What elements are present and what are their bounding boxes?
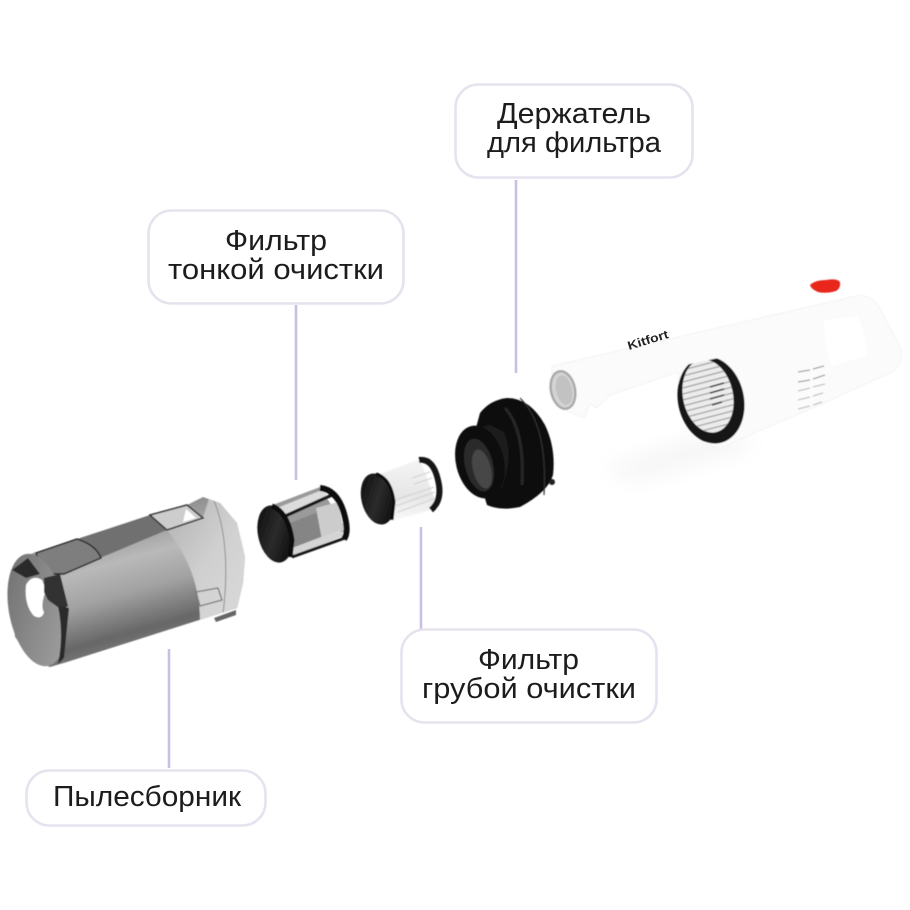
label: dust container xyxy=(26,770,266,826)
leader lines xyxy=(169,180,516,768)
label: filter holder xyxy=(456,84,692,178)
motor top cover xyxy=(676,348,732,368)
dust container xyxy=(0,490,250,671)
fine mesh filter xyxy=(252,487,347,566)
front cap xyxy=(252,502,298,566)
side vents xyxy=(798,366,825,382)
label: filter holder: Держатель xyxy=(497,98,651,130)
back ring xyxy=(320,488,347,539)
label: coarse filter xyxy=(402,630,656,722)
label: fine filter: тонкой очистки xyxy=(168,254,384,286)
handle body xyxy=(552,295,902,448)
coarse pleated filter xyxy=(356,459,439,528)
label: dust container: Пылесборник xyxy=(53,781,242,813)
front hood xyxy=(36,539,101,574)
brand: Kitfort xyxy=(626,327,670,353)
filter holder xyxy=(448,398,555,509)
clear end xyxy=(168,499,246,620)
mesh body xyxy=(270,487,347,557)
motor grill xyxy=(676,355,740,437)
tube xyxy=(462,425,509,495)
back ring xyxy=(419,460,439,510)
nozzle ring xyxy=(547,369,579,411)
top window xyxy=(150,505,203,530)
pleated body xyxy=(380,459,438,521)
flange xyxy=(470,398,554,509)
power button xyxy=(810,279,840,293)
label: fine filter: Фильтр xyxy=(225,225,327,257)
label: coarse filter: грубой очистки xyxy=(422,673,636,705)
label: filter holder: для фильтра xyxy=(487,127,661,159)
front cap xyxy=(356,470,399,528)
label: coarse filter: Фильтр xyxy=(478,644,579,676)
container body xyxy=(14,496,244,668)
floor shadow xyxy=(600,430,760,480)
label: fine filter xyxy=(148,210,404,304)
latch xyxy=(12,558,40,578)
front ring xyxy=(0,549,75,671)
handle opening xyxy=(824,316,866,366)
dark band xyxy=(77,515,167,558)
dust opening xyxy=(26,578,46,617)
motor black ring xyxy=(670,350,752,450)
handheld vacuum xyxy=(548,278,902,449)
frame bars xyxy=(283,495,332,517)
